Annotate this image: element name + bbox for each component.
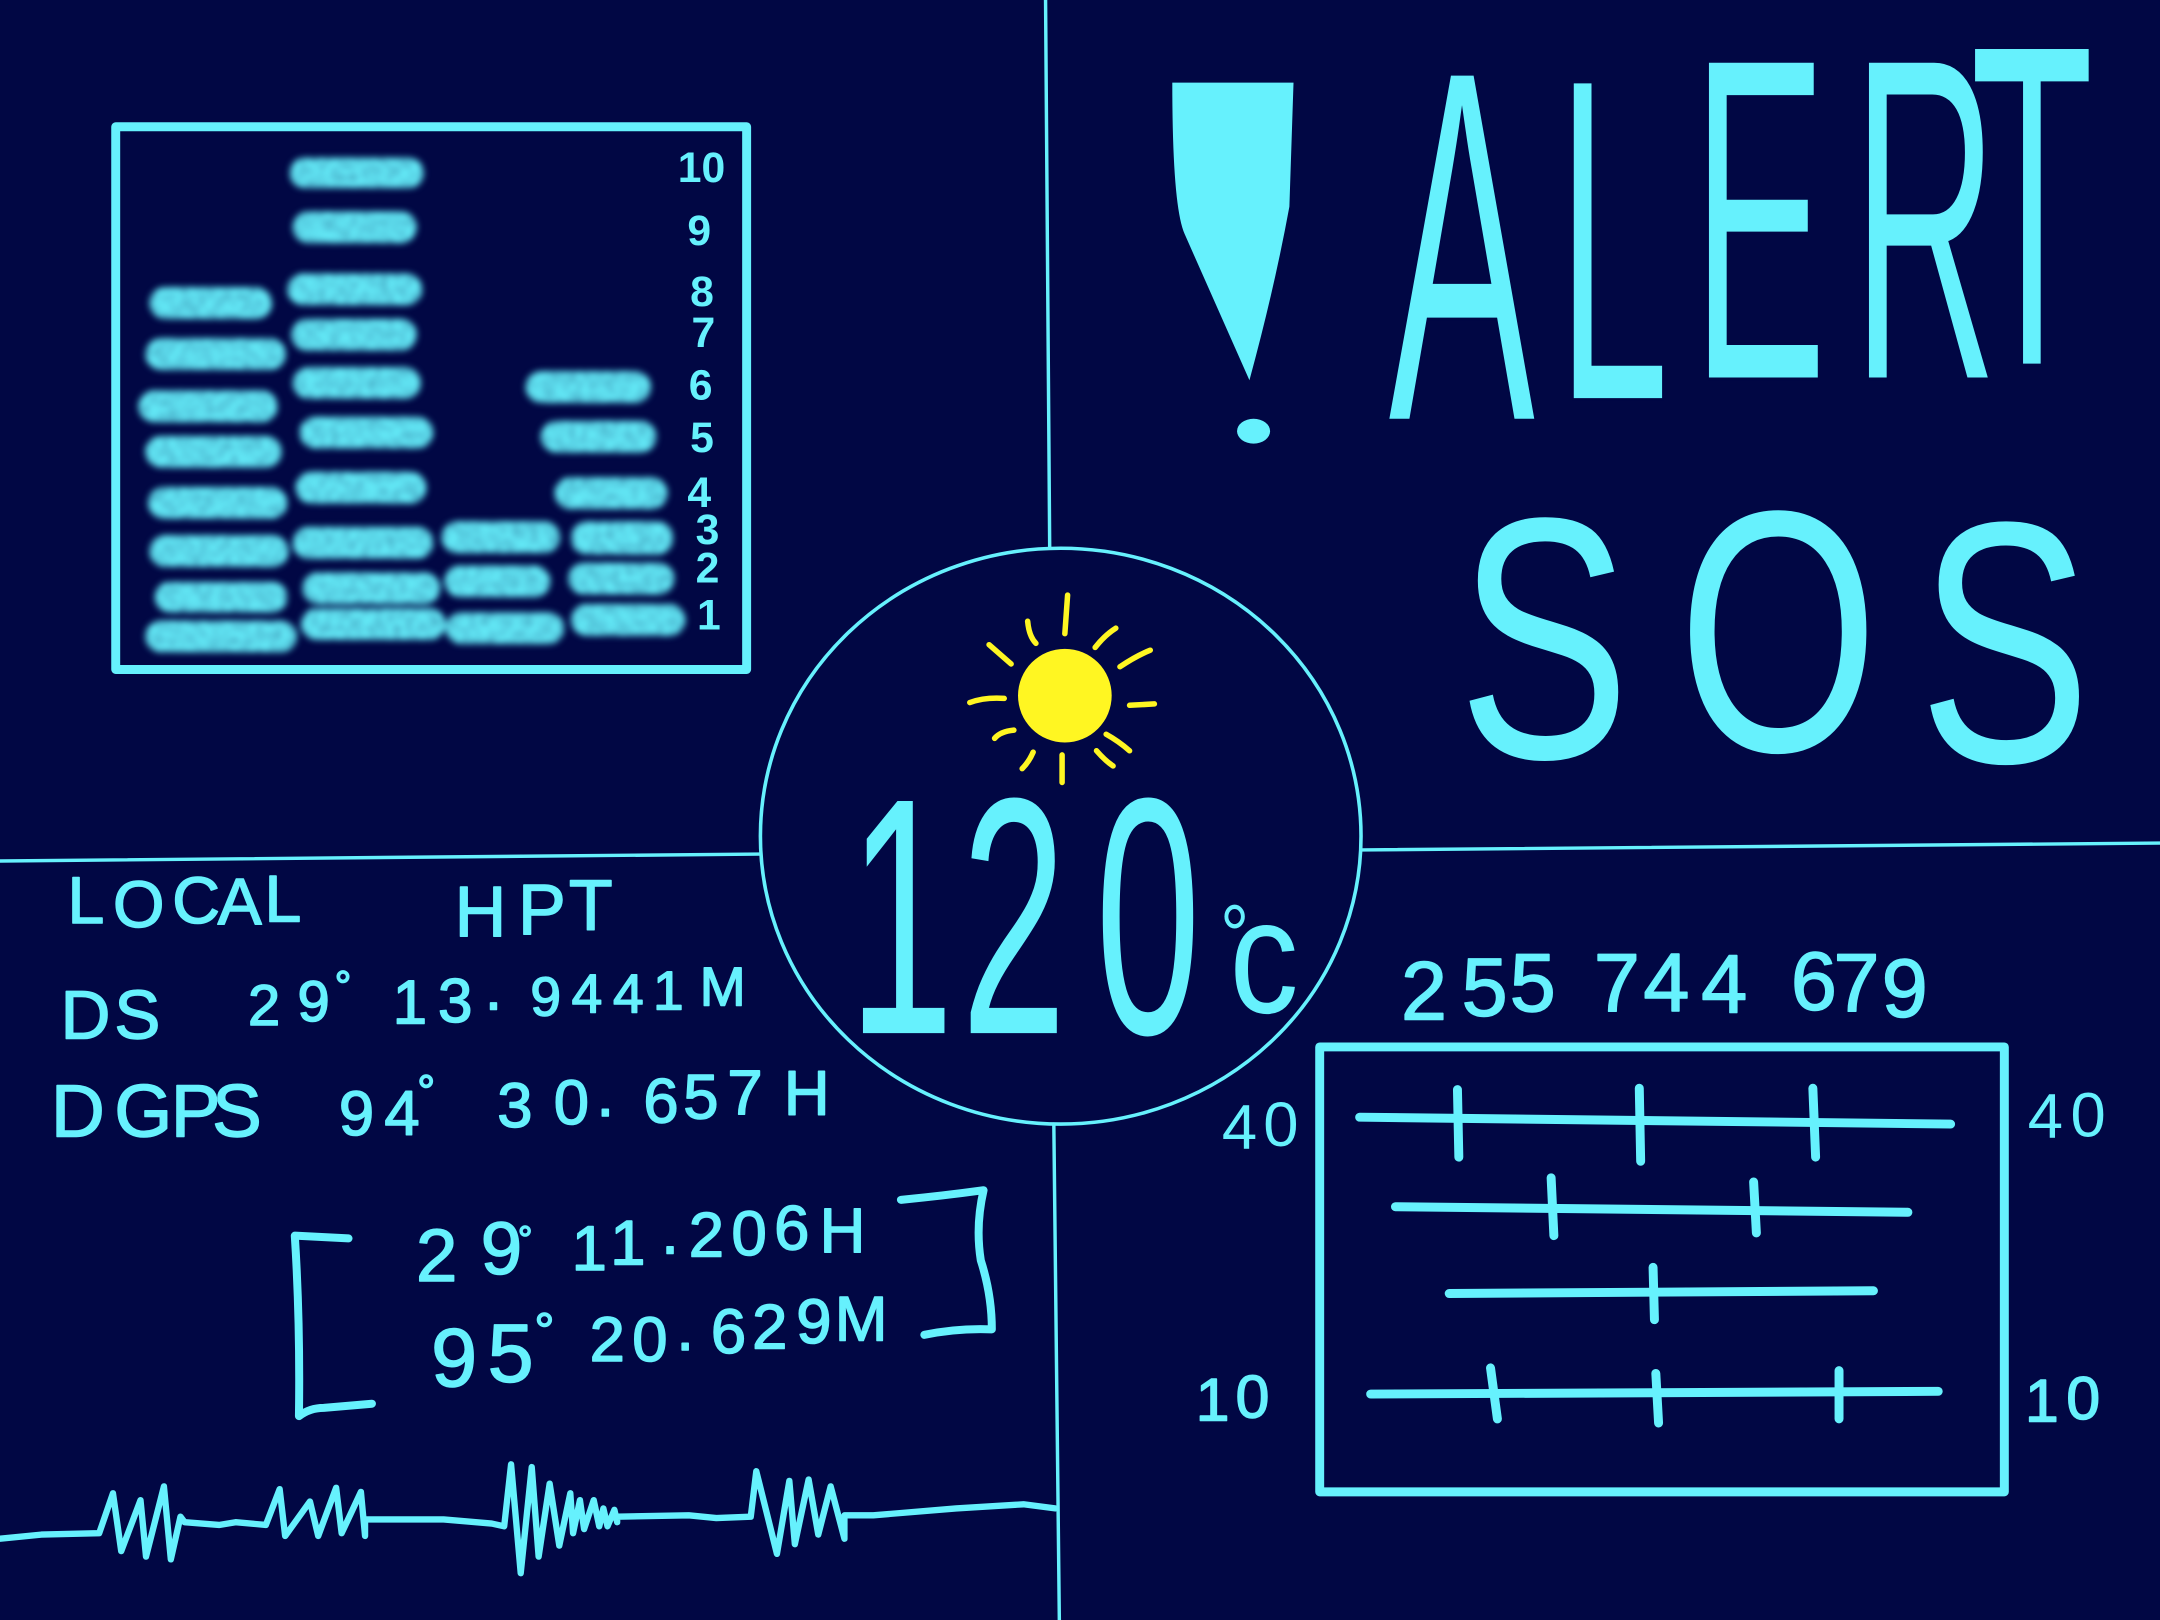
panel: range meter: [1196, 935, 2106, 1492]
label: 255 744 679: 255 744 679: [1401, 935, 1928, 1037]
scale lines: [1360, 1117, 1951, 1394]
labels: 40 and 10: [1196, 1080, 2106, 1435]
value: 95 20.629M: 95: [431, 1307, 534, 1404]
scale numbers: 3: [696, 506, 719, 554]
scale numbers: 4: [687, 469, 711, 517]
label: DS: DS: [61, 977, 160, 1054]
value: 94 30.657H: 30.657H: [497, 1058, 830, 1141]
labels: 40 and 10: 40: [2028, 1080, 2106, 1152]
scale numbers: 10: [678, 144, 725, 192]
panel: alert: [1172, 0, 2094, 835]
scale numbers: 7: [692, 309, 715, 357]
bars: [141, 160, 683, 650]
panel: temperature dial: [760, 548, 1361, 1124]
value: 29 11.206H: 29: [416, 1207, 522, 1297]
bracket left: [295, 1236, 372, 1416]
value: 94 30.657H: 94: [339, 1079, 420, 1149]
value: 29 11.206H: °: [518, 1219, 532, 1259]
scale numbers: 9: [687, 207, 711, 255]
label: HPT: HPT: [455, 866, 613, 953]
scale numbers: 6: [689, 361, 713, 409]
panel: bar chart: [116, 127, 747, 669]
dial ring: [760, 548, 1361, 1124]
value: 29 13.9441M: °: [335, 963, 351, 1009]
value: 29 13.9441M: 9441M: [530, 956, 746, 1027]
chart frame: [116, 127, 747, 669]
value: 95 20.629M: °: [534, 1302, 554, 1358]
scale numbers: 1: [697, 592, 721, 640]
label: LOCAL: LOCAL: [68, 863, 301, 942]
panel: coordinates: [51, 863, 992, 1416]
labels: 40 and 10: 40: [1222, 1090, 1298, 1163]
value: 29 13.9441M: 13.: [393, 955, 502, 1038]
value: 95 20.629M: 20.629M: [590, 1284, 888, 1375]
temperature reading: c: [1229, 865, 1299, 1047]
meter frame: [1320, 1047, 2004, 1492]
icon: sun: [970, 595, 1154, 782]
scale numbers: 2: [696, 545, 719, 593]
bracket right: [901, 1190, 992, 1335]
temperature reading: 120: [849, 727, 1201, 1105]
temperature reading: °: [1220, 887, 1249, 983]
waveform: [0, 1464, 1055, 1573]
tick marks: [1457, 1088, 1839, 1423]
labels: 40 and 10: 10: [1196, 1363, 1269, 1433]
value: 29 11.206H: 11.206H: [572, 1193, 865, 1284]
scale numbers: 5: [690, 414, 714, 462]
icon: exclamation wedge: [1172, 83, 1294, 444]
value: 94 30.657H: °: [417, 1067, 435, 1116]
scale numbers: [678, 144, 725, 640]
value: 29 13.9441M: 29: [248, 970, 330, 1038]
labels: 40 and 10: 10: [2025, 1364, 2100, 1435]
scale numbers: 8: [690, 268, 714, 316]
label: DGPS: DGPS: [51, 1069, 262, 1152]
heading: SOS: SOS: [1458, 439, 2091, 835]
